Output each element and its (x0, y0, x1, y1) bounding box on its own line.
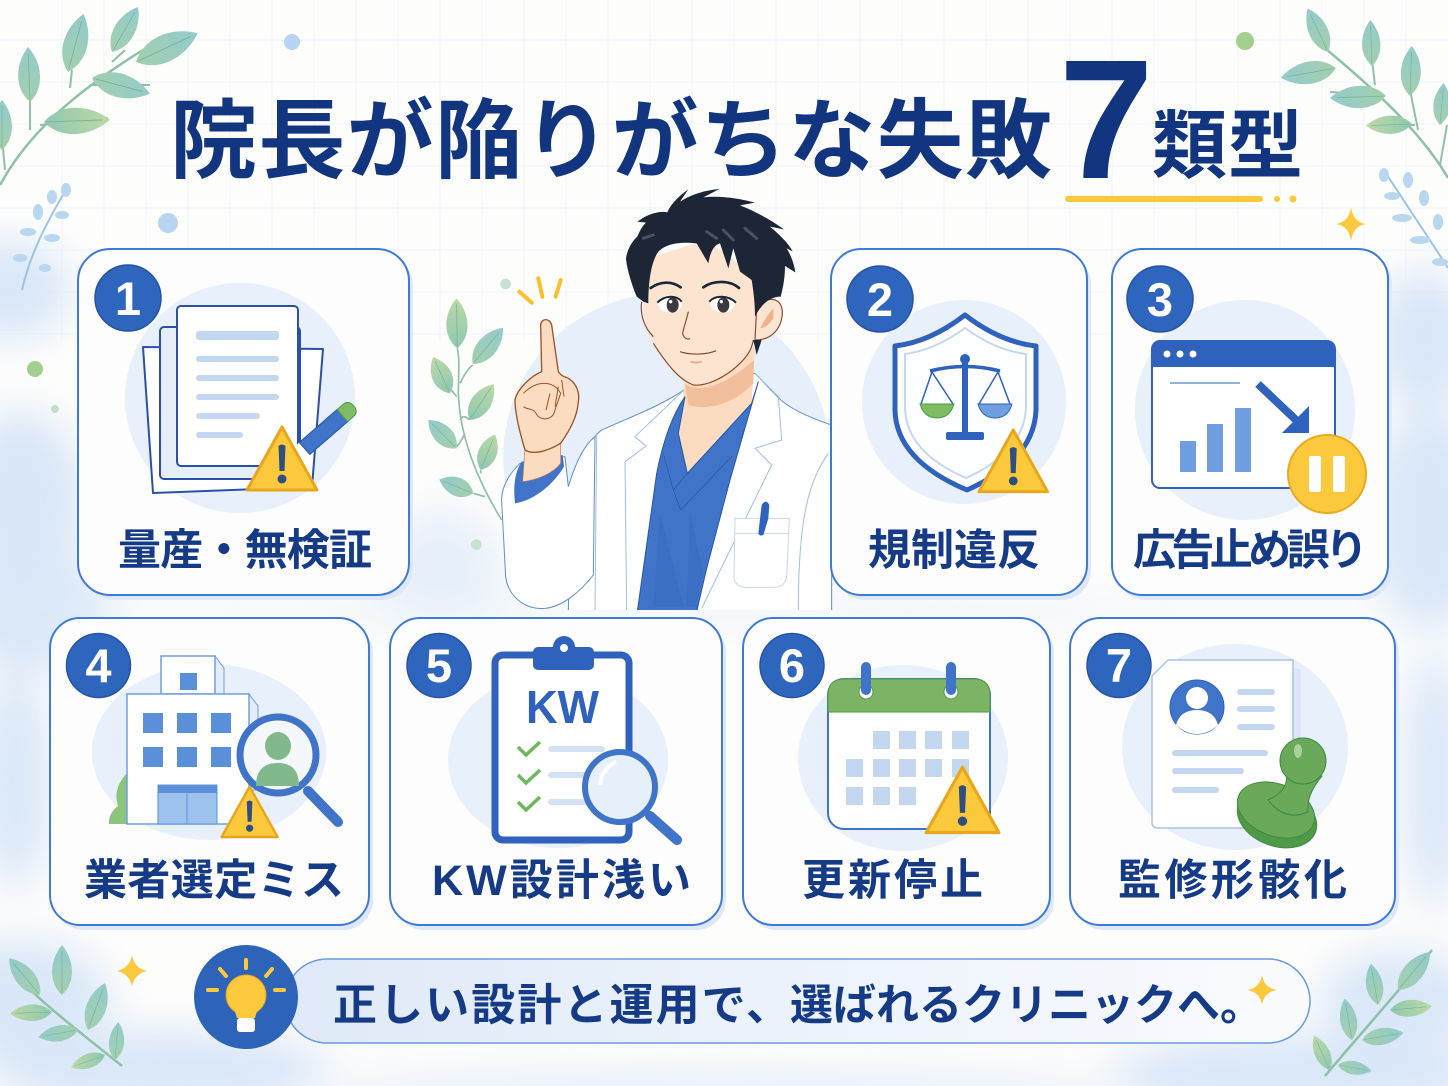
neck (678, 347, 755, 473)
number badge 4 (66, 634, 130, 698)
number badge 7 (1087, 634, 1151, 698)
pen and pocket (734, 502, 789, 587)
label: 広告止め誤り (1133, 527, 1368, 575)
label: 量産・無検証 (118, 527, 372, 575)
number badge 6 (760, 634, 824, 698)
lab coat (568, 373, 832, 613)
label: 更新停止 (802, 857, 983, 905)
title (170, 25, 1303, 215)
number badge 1 (95, 265, 161, 331)
hair (626, 189, 795, 317)
lab coat sleeve (502, 437, 595, 608)
number badge 7: 7 (1106, 639, 1132, 692)
decorative leaves: bottom right (1307, 945, 1438, 1078)
banner text (333, 981, 1263, 1030)
icon: stacked documents with pencil and warning (143, 306, 359, 493)
cuff (514, 455, 564, 503)
decorative leaves: top right (1279, 4, 1448, 178)
icon: shield with scales and warning (895, 315, 1048, 492)
scrub (637, 382, 758, 612)
face (641, 240, 782, 385)
panel 4: 業者選定ミス (50, 618, 373, 930)
title: 7 (1059, 25, 1154, 215)
pale circle behind doctor (504, 296, 826, 484)
title: 院長が陥りがちな失敗 (170, 93, 1052, 190)
icon: light bulb (194, 945, 298, 1049)
banner text: 選ばれるクリニックへ。 (790, 982, 1263, 1030)
icon: document with stamp (1152, 660, 1326, 858)
number badge 1: 1 (115, 272, 141, 325)
label: 業者選定ミス (84, 857, 344, 905)
label: 規制違反 (868, 527, 1040, 575)
decorative sprig: left (13, 183, 71, 290)
decorative sprig: right (1379, 168, 1448, 268)
panel 1: 量産・無検証 (78, 249, 413, 600)
icon: KW clipboard with magnifier: KW (526, 681, 600, 733)
icon: browser chart with pause (1152, 341, 1366, 513)
decorative dots (27, 32, 1254, 413)
plant (428, 298, 504, 520)
sparkle (1247, 975, 1277, 1005)
green dots and yellow spark lines (471, 278, 561, 550)
number badge 4: 4 (85, 639, 112, 692)
banner text: 正しい設計と運用で、 (333, 981, 790, 1030)
number badge 2 (847, 266, 913, 332)
doctor illustration with plant (422, 189, 832, 620)
panel 2: 規制違反 (831, 249, 1091, 600)
decorative leaves: top left (0, 2, 203, 185)
number badge 2: 2 (867, 273, 893, 326)
sparkle: bottom left (117, 955, 147, 987)
forearm (523, 443, 561, 482)
panel 6: 更新停止 (743, 618, 1054, 930)
number badge 5 (407, 634, 471, 698)
icon: KW clipboard with magnifier (495, 636, 677, 840)
sparkle: top right (1336, 207, 1366, 241)
panel 7: 監修形骸化 (1070, 618, 1399, 930)
panel 5: KW設計浅い (390, 618, 726, 930)
number badge 5: 5 (426, 639, 452, 692)
icon: calendar with warning (828, 662, 999, 833)
hand (515, 320, 579, 452)
label: 監修形骸化 (1118, 857, 1347, 905)
bottom banner (194, 945, 1310, 1049)
label: KW設計浅い (432, 857, 691, 905)
icon: clinic building with magnifier (109, 656, 338, 837)
title: 類型 (1152, 104, 1303, 188)
number badge 3: 3 (1147, 273, 1173, 326)
lapels and coat lines (595, 373, 828, 610)
number badge 3 (1127, 266, 1193, 332)
panel 3: 広告止め誤り (1112, 249, 1392, 600)
decorative leaves: bottom left (2, 945, 126, 1074)
number badge 6: 6 (779, 639, 805, 692)
